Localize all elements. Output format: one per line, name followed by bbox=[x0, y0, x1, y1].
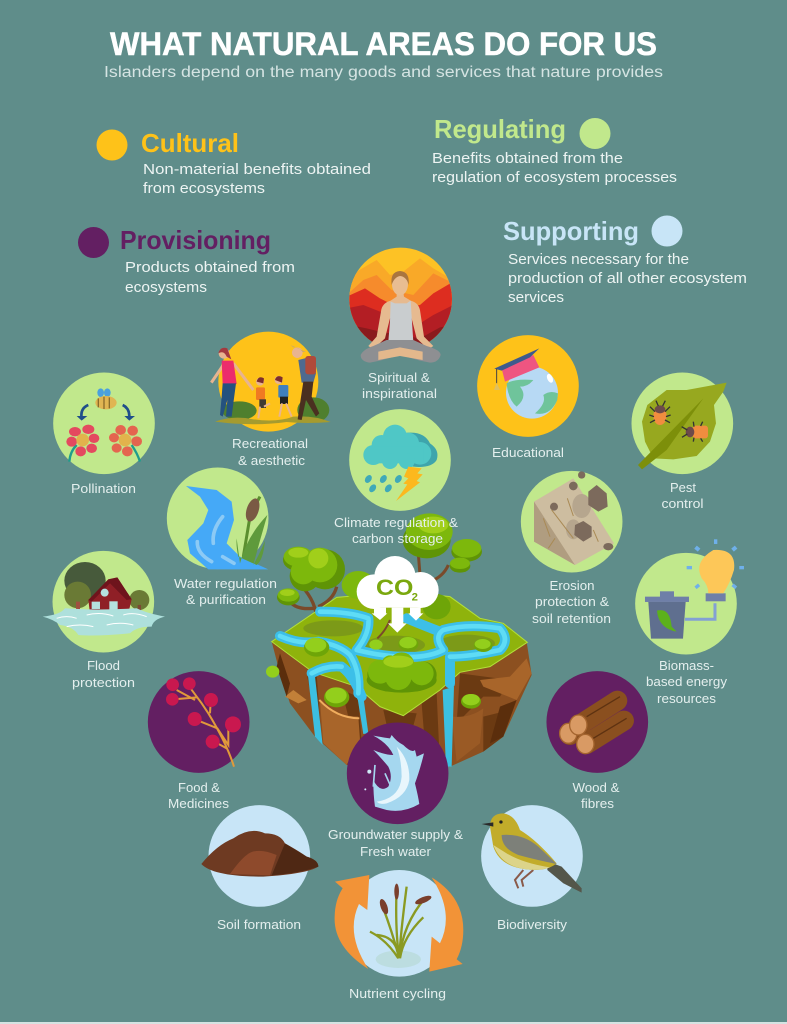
label bbox=[168, 780, 230, 811]
panel: pollination bbox=[53, 372, 155, 496]
subtitle: Islanders depend on the many goods and services that nature provides bbox=[104, 64, 663, 81]
legend: provisioning: ecosystems bbox=[125, 280, 207, 296]
label: Biomass- bbox=[659, 658, 714, 673]
icon: globe with graduation cap bbox=[477, 335, 579, 437]
label: Fresh water bbox=[360, 844, 432, 859]
legend: supporting: Supporting bbox=[503, 216, 639, 246]
label: Spiritual & bbox=[368, 370, 430, 385]
legend: supporting: Services necessary for the bbox=[508, 252, 689, 268]
label: Educational bbox=[492, 445, 564, 460]
legend: regulating bbox=[432, 114, 677, 186]
bushes bbox=[266, 571, 493, 709]
label: Biodiversity bbox=[497, 917, 568, 932]
label: inspirational bbox=[362, 386, 437, 401]
panel: biomass-based energy resources bbox=[635, 539, 744, 706]
legend: cultural: Cultural bbox=[141, 128, 239, 158]
panel: food and medicines bbox=[148, 671, 249, 811]
label: soil retention bbox=[532, 611, 611, 626]
right tree bbox=[403, 513, 482, 582]
icon: soil mound bbox=[201, 805, 318, 907]
icon: family walking bbox=[211, 332, 331, 432]
CO2 cloud with arrows: 2 bbox=[412, 592, 418, 604]
label: Flood bbox=[87, 658, 120, 673]
label: based energy bbox=[646, 674, 728, 689]
circle with reeds bbox=[335, 870, 463, 977]
label: Water regulation bbox=[174, 576, 277, 591]
icon: bee and flowers bbox=[53, 372, 155, 474]
waterfalls bbox=[307, 670, 454, 767]
label: protection & bbox=[535, 594, 609, 609]
panel: climate regulation and carbon storage bbox=[334, 409, 458, 546]
label: Nutrient cycling bbox=[349, 986, 446, 1001]
icon: yellow bird bbox=[481, 805, 583, 907]
label: Soil formation bbox=[217, 917, 301, 932]
icon: eroding hillside bbox=[521, 471, 622, 572]
icon: water splash bbox=[347, 722, 448, 824]
label: Erosion bbox=[550, 578, 594, 593]
panel: educational bbox=[477, 335, 579, 460]
cliffs bbox=[272, 642, 532, 767]
legend: regulating: regulation of ecosystem processes bbox=[432, 170, 677, 186]
icon: meditating woman on sunset bbox=[347, 247, 457, 363]
title: WHAT NATURAL AREAS DO FOR US bbox=[110, 26, 657, 62]
label bbox=[572, 780, 620, 811]
label bbox=[646, 658, 728, 706]
icon: bin and light bulb bbox=[635, 539, 744, 654]
legend: regulating: Benefits obtained from the bbox=[432, 151, 623, 167]
legend: supporting bbox=[503, 216, 747, 306]
label bbox=[334, 515, 458, 546]
panel: biodiversity bbox=[481, 805, 583, 932]
CO2 cloud with arrows: CO bbox=[376, 575, 413, 600]
legend: cultural: from ecosystems bbox=[143, 181, 265, 197]
label: Recreational bbox=[232, 436, 308, 451]
label bbox=[362, 370, 437, 401]
panel: soil formation bbox=[201, 805, 318, 932]
icon: berry branch bbox=[148, 671, 249, 773]
panel: water regulation and purification bbox=[167, 467, 277, 607]
island top bbox=[272, 592, 527, 716]
panel: recreational and aesthetic bbox=[211, 332, 331, 468]
panel: pest control bbox=[631, 372, 733, 511]
panel: flood protection bbox=[43, 551, 165, 690]
label: & aesthetic bbox=[238, 453, 306, 468]
legend: cultural: Non-material benefits obtained bbox=[143, 162, 371, 178]
icon: flooded house bbox=[43, 551, 165, 652]
legend: regulating: Regulating bbox=[434, 114, 566, 144]
label bbox=[72, 658, 135, 690]
CO2 cloud with arrows bbox=[357, 556, 439, 633]
icon: storm cloud bbox=[349, 409, 451, 511]
label: control bbox=[662, 496, 704, 511]
label bbox=[328, 827, 463, 859]
icon: stream and cattail bbox=[167, 467, 268, 569]
label: Climate regulation & bbox=[334, 515, 458, 530]
label bbox=[532, 578, 611, 626]
land patches bbox=[303, 620, 495, 654]
panel: nutrient cycling bbox=[335, 870, 463, 1001]
panel: spiritual and inspirational bbox=[347, 247, 457, 401]
panel: groundwater supply and fresh water bbox=[328, 722, 463, 859]
label: Medicines bbox=[168, 796, 230, 811]
panel: wood and fibres bbox=[546, 671, 648, 811]
label bbox=[232, 436, 308, 468]
icon: stacked logs bbox=[546, 671, 648, 773]
panel: erosion protection and soil retention bbox=[521, 471, 622, 626]
label: carbon storage bbox=[352, 531, 443, 546]
legend: cultural bbox=[96, 128, 371, 197]
rivers bbox=[280, 612, 505, 697]
label bbox=[174, 576, 277, 607]
legend: provisioning bbox=[78, 225, 295, 296]
left tree bbox=[277, 547, 345, 625]
icon: leaf with beetles bbox=[631, 372, 733, 474]
label: Wood & bbox=[572, 780, 620, 795]
label: & purification bbox=[186, 592, 266, 607]
label: Pollination bbox=[71, 481, 136, 496]
legend: provisioning: Products obtained from bbox=[125, 260, 295, 276]
legend: supporting: production of all other ecosystem bbox=[508, 271, 747, 287]
label bbox=[662, 480, 704, 511]
label: Food & bbox=[178, 780, 220, 795]
illustration: floating island bbox=[266, 513, 532, 767]
label: Groundwater supply & bbox=[328, 827, 463, 842]
icon: orange cycle arrows bbox=[335, 875, 463, 972]
label: Pest bbox=[670, 480, 696, 495]
legend: supporting: services bbox=[508, 290, 564, 306]
label: resources bbox=[657, 691, 717, 706]
legend: provisioning: Provisioning bbox=[120, 225, 271, 255]
label: protection bbox=[72, 675, 135, 690]
label: fibres bbox=[581, 796, 615, 811]
